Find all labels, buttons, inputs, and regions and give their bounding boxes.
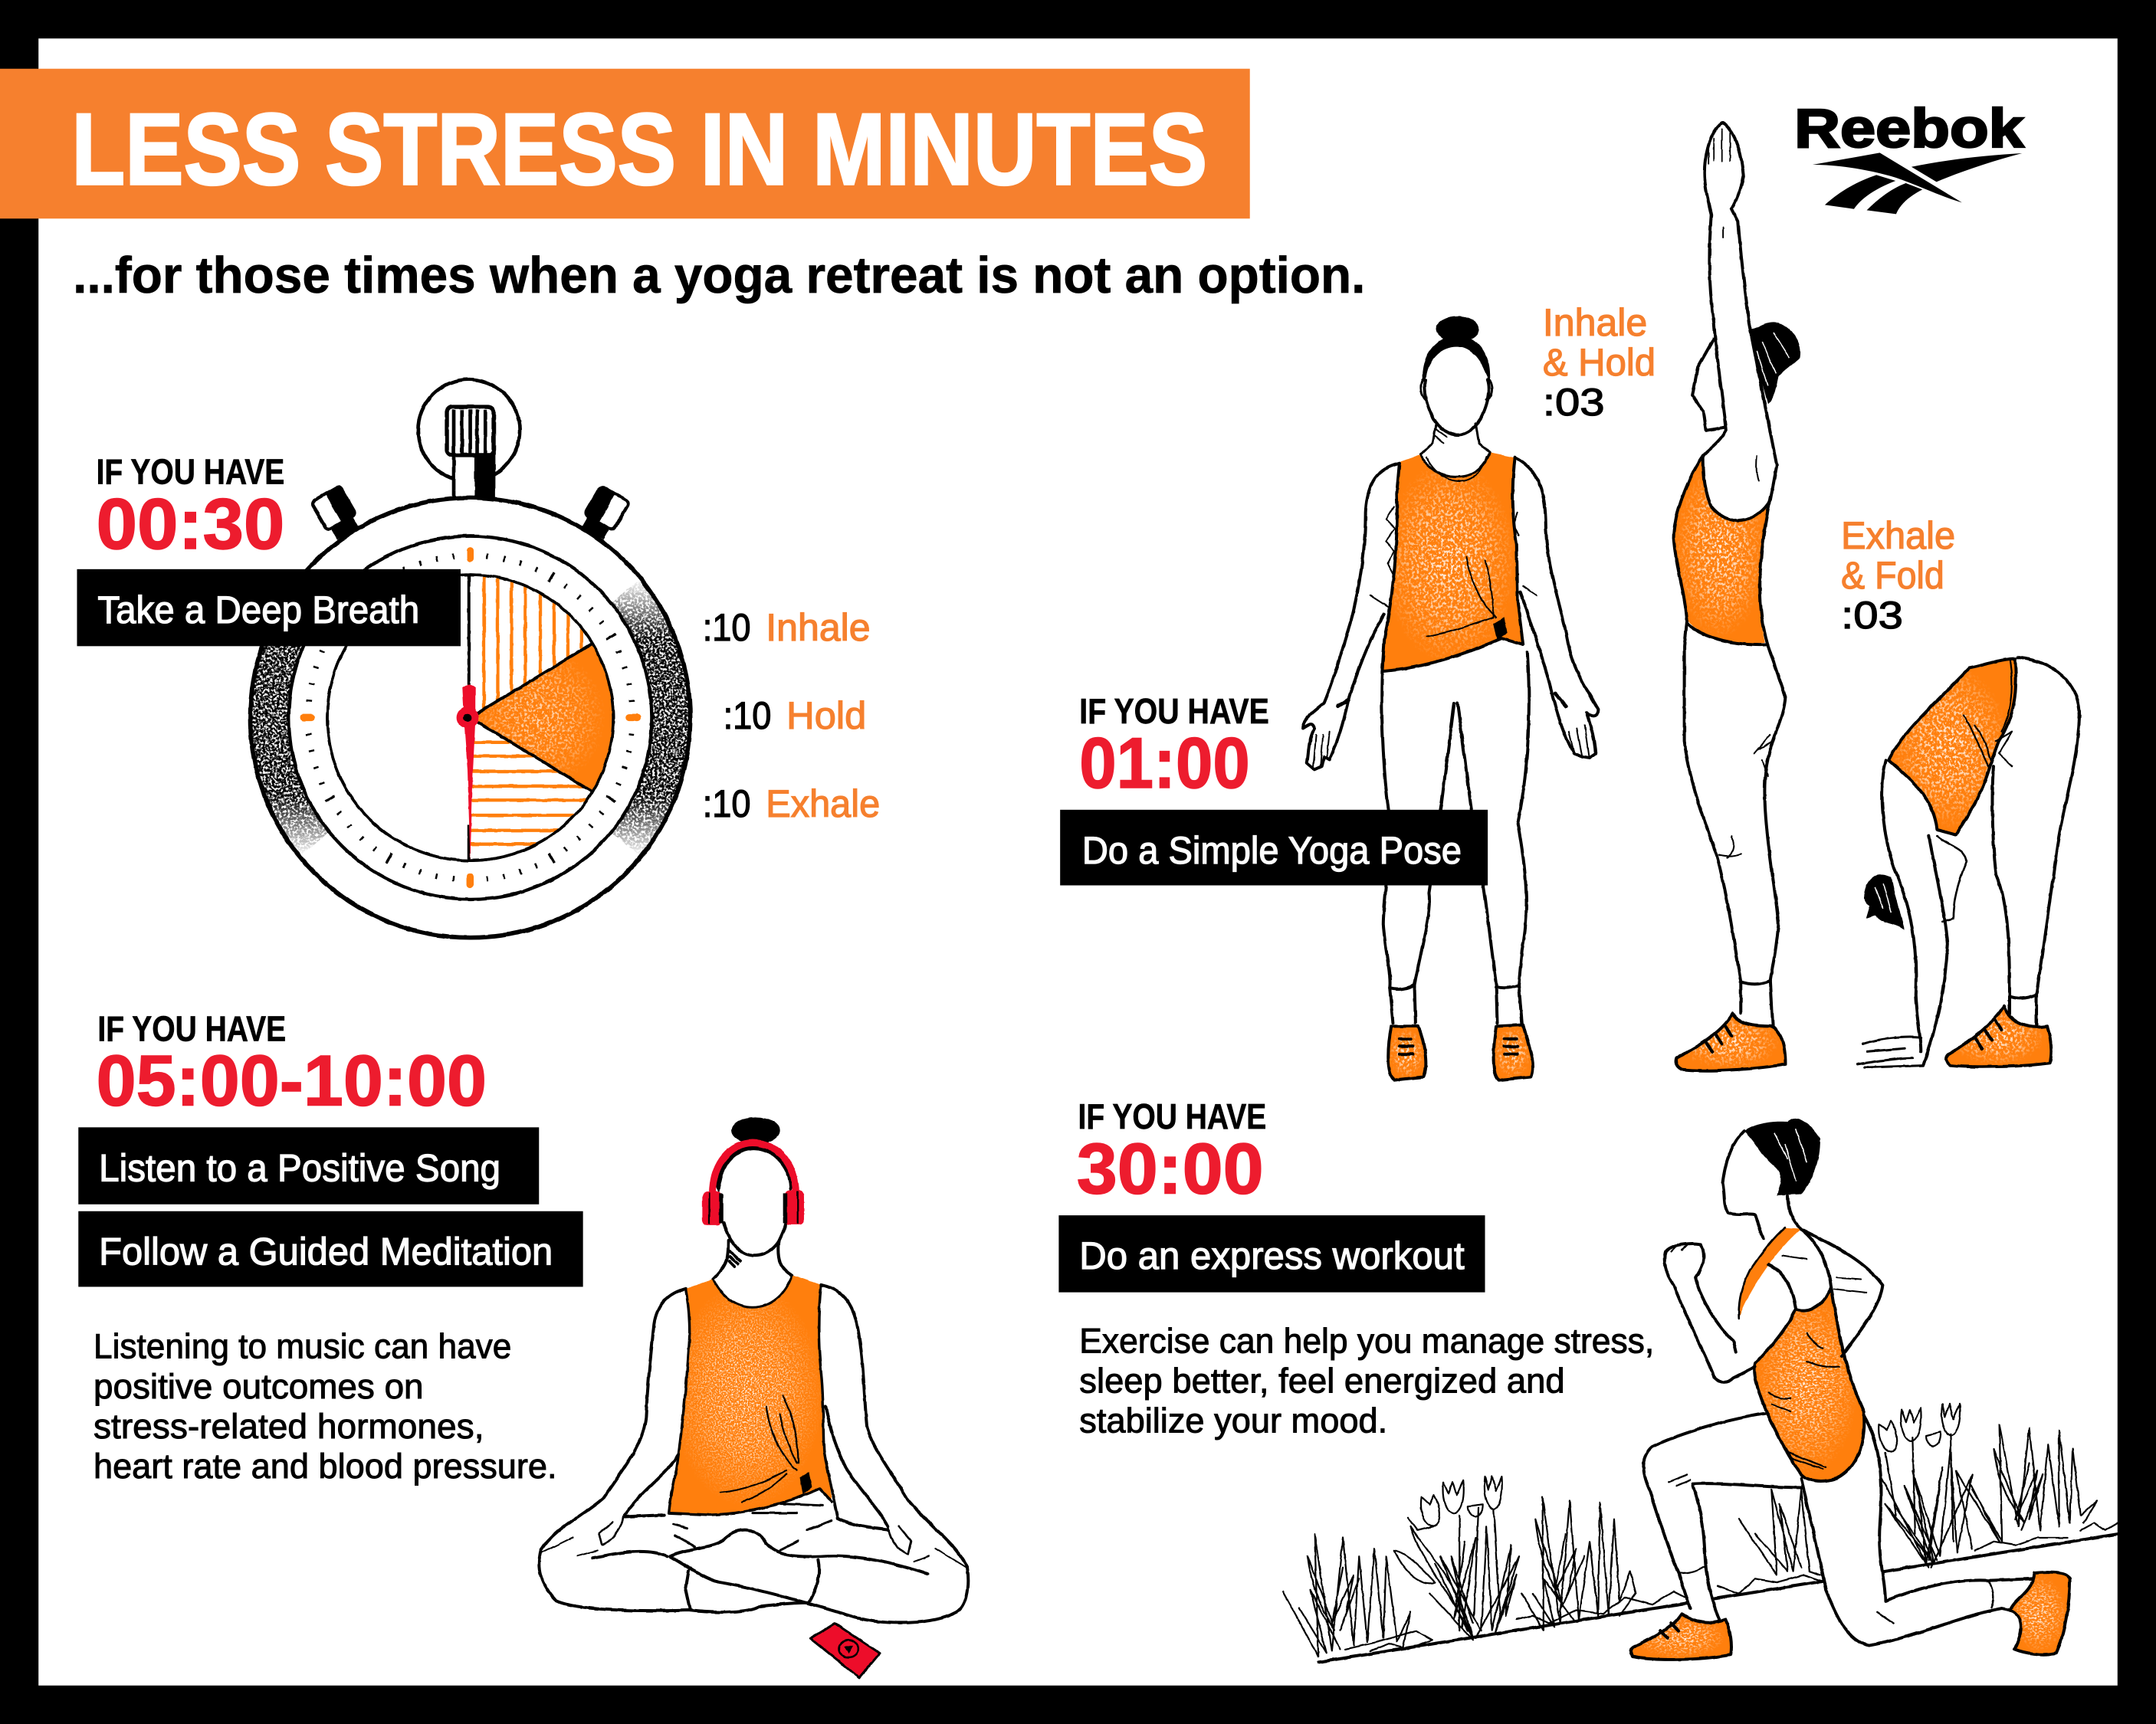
hanging hair <box>1864 874 1905 930</box>
label: inhale and hold: & Hold <box>1543 341 1656 384</box>
if you have label: IF YOU HAVE <box>1079 691 1269 731</box>
time 01:00: 01:00 <box>1079 723 1250 803</box>
inhale stripes <box>484 575 582 710</box>
label: inhale and hold: Inhale <box>1543 301 1647 344</box>
action box: meditation: Follow a Guided Meditation <box>99 1231 553 1273</box>
icon: right pusher <box>579 486 629 542</box>
music paragraph: positive outcomes on <box>94 1367 424 1406</box>
side shoe <box>1676 1014 1785 1070</box>
exercise paragraph <box>1079 1322 1654 1440</box>
label: exhale and fold: & Fold <box>1841 554 1944 597</box>
icon: red phone <box>810 1624 880 1677</box>
segment dividers <box>469 575 592 860</box>
legs and arms skin <box>1993 657 2079 1026</box>
title banner <box>0 69 1250 218</box>
section: 30:00 workout <box>1058 1096 1654 1440</box>
subtitle: ...for those times when a yoga retreat is not an option. <box>73 247 1365 304</box>
bun and hair <box>1423 316 1490 383</box>
tank top <box>1382 453 1523 671</box>
section: 01:00 yoga pose <box>1060 691 1488 886</box>
left shoe <box>1388 1026 1426 1080</box>
exhale stripes <box>471 742 587 844</box>
torso and arm skin <box>1674 123 1785 1029</box>
label: exhale and fold: Exhale <box>1841 514 1955 557</box>
body skin <box>1643 1131 2002 1646</box>
action box <box>1058 1215 1485 1293</box>
stopwatch case <box>251 498 691 938</box>
hair bun <box>731 1117 780 1144</box>
sock skin <box>1988 1578 2035 1610</box>
exercise paragraph: sleep better, feel energized and <box>1079 1362 1565 1401</box>
illustration: grass and flowers <box>1283 1404 2118 1662</box>
label: exhale and fold <box>1841 514 1955 637</box>
icon: left pusher <box>311 486 363 542</box>
body outline <box>1303 380 1598 1023</box>
action box <box>1060 810 1488 886</box>
right shoe <box>1494 1025 1533 1080</box>
headphones <box>702 1142 804 1225</box>
fold shoe <box>1946 1006 2051 1067</box>
tank top <box>669 1275 832 1515</box>
hair <box>1744 1118 1820 1195</box>
action box: meditation <box>78 1211 583 1286</box>
stopwatch illustration <box>251 379 691 938</box>
label: inhale and hold <box>1543 301 1656 424</box>
if you have label: IF YOU HAVE <box>97 1008 286 1048</box>
breath timing legend: Inhale <box>766 606 871 649</box>
action box: Take a Deep Breath <box>97 588 419 631</box>
music paragraph: heart rate and blood pressure. <box>94 1447 557 1486</box>
action box <box>77 569 461 646</box>
red stopwatch hand <box>457 685 478 860</box>
body outline <box>1674 123 1785 1029</box>
if you have label: IF YOU HAVE <box>97 452 284 492</box>
section: 00:30 deep breath <box>77 452 461 646</box>
hair <box>1749 322 1800 404</box>
label: exhale and fold: :03 <box>1841 594 1903 637</box>
title banner: LESS STRESS IN MINUTES <box>71 93 1207 206</box>
music paragraph <box>94 1327 557 1486</box>
dial ticks <box>300 547 641 888</box>
exercise paragraph: stabilize your mood. <box>1079 1401 1387 1440</box>
figure: standing front pose <box>1303 316 1598 1080</box>
rear shoe <box>2010 1572 2070 1654</box>
exercise paragraph: Exercise can help you manage stress, <box>1079 1322 1654 1361</box>
tank top <box>1674 456 1770 644</box>
music paragraph: Listening to music can have <box>94 1327 511 1366</box>
Reebok logo <box>1794 98 2024 214</box>
music paragraph: stress-related hormones, <box>94 1407 484 1446</box>
face and neck <box>713 1150 793 1280</box>
action box: Do a Simple Yoga Pose <box>1082 829 1462 872</box>
breath timing legend: :10 <box>703 782 751 825</box>
action box: song <box>78 1127 539 1205</box>
tank top <box>1889 659 2016 835</box>
body outline <box>1643 1131 2035 1646</box>
breath timing legend <box>703 606 880 825</box>
breath timing legend: :10 <box>703 606 751 649</box>
hair <box>716 1139 793 1193</box>
time 05:00-10:00: 05:00-10:00 <box>97 1041 487 1121</box>
body skin <box>539 1285 968 1623</box>
tank top <box>1739 1227 1864 1481</box>
figure: arms raised side pose <box>1674 123 1800 1070</box>
figure: lunging runner <box>1631 1118 2070 1660</box>
figure: seated meditation with headphones <box>539 1117 968 1677</box>
section: 05:00-10:00 music and meditation <box>78 1008 583 1486</box>
figure: forward fold pose <box>1857 657 2079 1067</box>
if you have label: IF YOU HAVE <box>1078 1096 1266 1136</box>
hold wedge <box>471 644 613 792</box>
time 00:30: 00:30 <box>97 484 284 564</box>
body outline <box>539 1275 968 1623</box>
label: inhale and hold: :03 <box>1543 381 1605 424</box>
breath timing legend: :10 <box>724 694 771 737</box>
action box: song: Listen to a Positive Song <box>99 1146 500 1189</box>
icon: stopwatch crown <box>418 379 520 500</box>
dial face <box>327 575 613 860</box>
breath timing legend: Exhale <box>766 782 880 825</box>
time 30:00: 30:00 <box>1077 1129 1264 1208</box>
breath timing legend: Hold <box>786 694 866 737</box>
Reebok logo: Reebok <box>1794 98 2024 159</box>
action box: Do an express workout <box>1079 1234 1465 1277</box>
front shoe <box>1631 1614 1731 1660</box>
body outline <box>1857 657 2079 1067</box>
